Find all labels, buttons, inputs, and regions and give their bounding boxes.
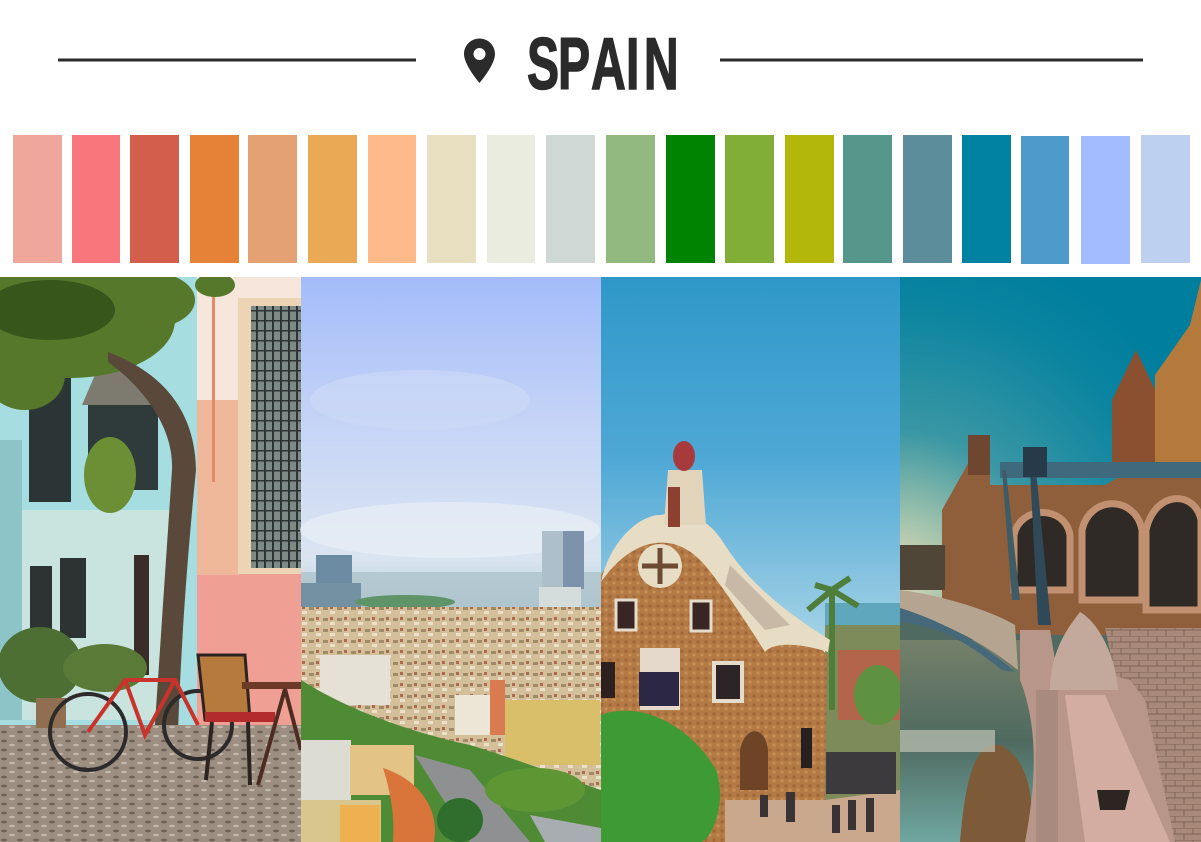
ground behind plaza	[900, 600, 1201, 842]
title text: SPAIN	[527, 24, 679, 106]
palace wing	[942, 460, 1201, 635]
stone balustrade	[1020, 630, 1175, 842]
left title rule	[58, 58, 416, 62]
pink wall	[197, 277, 301, 400]
title	[58, 24, 1143, 106]
tree trunk	[108, 352, 196, 725]
sea and background	[825, 603, 900, 625]
bridge	[900, 590, 1018, 670]
right title rule	[720, 58, 1143, 62]
canal water	[900, 640, 1035, 842]
balustrade	[1000, 462, 1201, 478]
photo: Barcelona skyline	[300, 277, 601, 842]
bicycle	[50, 680, 232, 770]
window with grille	[238, 298, 301, 574]
foliage	[0, 277, 235, 410]
distant towers	[542, 531, 563, 588]
haze band	[301, 572, 601, 610]
paved plaza	[1105, 628, 1201, 842]
photo: Park Guell gatehouse	[601, 277, 902, 842]
upper balcony windows	[29, 370, 71, 502]
icon: location pin	[464, 38, 495, 83]
photo: Plaza de Espana	[900, 277, 1201, 842]
photo: street with bicycle	[0, 262, 301, 842]
cafe chair	[198, 655, 250, 720]
sky	[900, 277, 1201, 607]
sky	[601, 277, 900, 642]
city blocks	[301, 607, 601, 842]
plants	[0, 627, 82, 703]
foreground buildings	[301, 740, 351, 802]
gatehouse body	[601, 534, 827, 800]
mosaic roof	[601, 514, 830, 652]
spire	[664, 470, 706, 525]
iron fence	[826, 752, 896, 794]
cross window	[638, 544, 682, 588]
green bush	[601, 711, 720, 842]
visitors	[760, 792, 874, 833]
windows	[616, 600, 636, 630]
arches	[1014, 499, 1201, 610]
cafe table	[242, 682, 301, 689]
sky	[301, 277, 601, 607]
tree-lined avenue	[301, 680, 601, 842]
turquoise building	[0, 277, 200, 727]
colour palette swatches	[13, 135, 1190, 264]
clouds	[300, 502, 600, 558]
plaza with visitors	[725, 790, 900, 842]
lamp post	[1030, 470, 1051, 625]
doorway	[740, 731, 768, 790]
palm tree	[808, 578, 858, 710]
pavement	[0, 725, 301, 842]
